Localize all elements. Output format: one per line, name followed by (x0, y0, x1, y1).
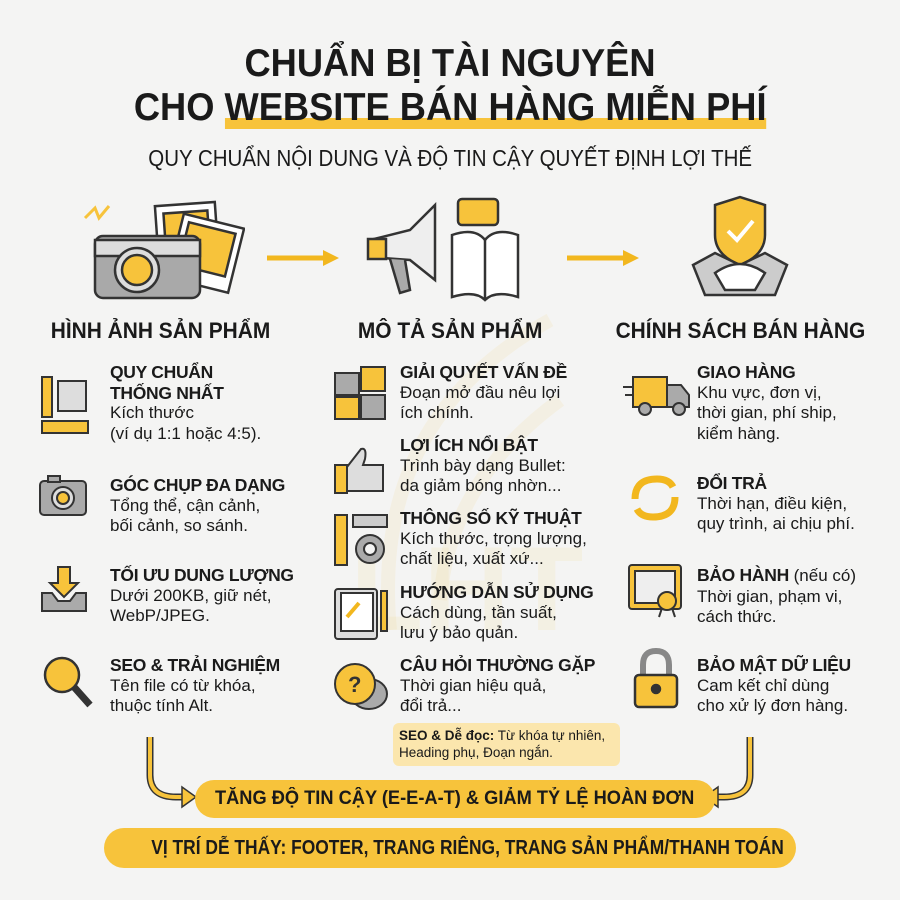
text: cau hoi: CÂU HỎI THƯỜNG GẶP (400, 655, 595, 675)
banner: vi tri: VỊ TRÍ DỄ THẤY: FOOTER, TRANG RIÊNG, TRANG SẢN PHẨM/THANH TOÁN (151, 837, 784, 859)
watermark logo: LHT (350, 522, 583, 656)
icon: manual book (334, 588, 388, 640)
icon: ruler square (41, 376, 89, 434)
callout: seo (393, 723, 620, 766)
text: thong so (400, 508, 587, 568)
text: bao hanh: cách thức. (697, 607, 776, 626)
heading: mo ta: MÔ TẢ SẢN PHẨM (358, 318, 542, 343)
text: cau hoi: đổi trả... (400, 696, 461, 715)
panel: left column (39, 362, 294, 715)
text: bao hanh: Thời gian, phạm vi, (697, 586, 842, 606)
text: giai quyet: GIẢI QUYẾT VẤN ĐỀ (400, 362, 567, 382)
text: quy chuan: THỐNG NHẤT (110, 382, 224, 402)
text: quy chuan: Kích thước (110, 403, 194, 422)
text: loi ich (400, 435, 566, 495)
text: goc chup: Tổng thể, cận cảnh, (110, 496, 260, 514)
text: giai quyet: Đoạn mở đầu nêu lợi (400, 382, 560, 402)
text: giao hang: Khu vực, đơn vị, (697, 382, 822, 402)
icon: thumbs up (334, 448, 384, 494)
text: bao mat: Cam kết chỉ dùng (697, 676, 829, 694)
text: cau hoi (400, 655, 595, 715)
text: bao hanh: BẢO HÀNH (nếu có) (697, 565, 856, 585)
icon: truck (623, 376, 690, 416)
banner: eeat: TĂNG ĐỘ TIN CẬY (E-E-A-T) & GIẢM TỶ LỆ HOÀN ĐƠN (215, 788, 695, 809)
callout: seo: SEO & Dễ đọc: Từ khóa tự nhiên, (399, 728, 605, 743)
text: bao hanh (697, 565, 856, 626)
icon: question bubble (334, 663, 388, 710)
text: goc chup: GÓC CHỤP ĐA DẠNG (110, 475, 285, 495)
text: seo (110, 655, 280, 715)
text: toi uu (110, 565, 294, 625)
text: giao hang: thời gian, phí ship, (697, 403, 837, 422)
text: toi uu: Dưới 200KB, giữ nét, (110, 586, 271, 604)
text: huong dan (400, 582, 593, 642)
heading: hinh anh: HÌNH ẢNH SẢN PHẨM (50, 318, 270, 343)
arrow 2 (567, 250, 639, 266)
text: quy chuan: (ví dụ 1:1 hoặc 4:5). (110, 424, 261, 442)
icon: download tray (41, 566, 87, 612)
watermark logo (350, 314, 583, 656)
text: doi tra: ĐỔI TRẢ (697, 473, 767, 493)
text: quy chuan (110, 362, 261, 442)
text: bao mat: cho xử lý đơn hàng. (697, 696, 848, 715)
icon: shield handshake (692, 196, 788, 296)
panel: right column (623, 362, 856, 715)
text: huong dan: lưu ý bảo quản. (400, 623, 518, 642)
text: cau hoi: Thời gian hiệu quả, (400, 676, 546, 694)
icon: exchange arrows (632, 476, 678, 520)
arrow: left curve (140, 735, 200, 810)
banner: vi tri (104, 828, 796, 868)
text: loi ich: LỢI ÍCH NỔI BẬT (400, 435, 538, 455)
icon: megaphone and book (366, 198, 520, 302)
text: toi uu: TỐI ƯU DUNG LƯỢNG (110, 565, 294, 585)
callout: seo: Heading phụ, Đoạn ngắn. (399, 745, 553, 760)
text: seo: SEO & TRẢI NGHIỆM (110, 655, 280, 675)
icon: padlock (634, 648, 678, 708)
title: CHUẨN BỊ TÀI NGUYÊN (244, 42, 656, 85)
arrow 1 (267, 250, 339, 266)
text: huong dan: HƯỚNG DẪN SỬ DỤNG (400, 582, 593, 602)
title: CHO WEBSITE BÁN HÀNG MIỄN PHÍ (134, 86, 766, 129)
text: doi tra (697, 473, 855, 533)
text: seo: thuộc tính Alt. (110, 696, 213, 715)
icon: magnifier (44, 656, 93, 708)
text: loi ich: da giảm bóng nhờn... (400, 476, 561, 495)
text: huong dan: Cách dùng, tần suất, (400, 602, 557, 622)
text: giao hang: kiểm hàng. (697, 424, 780, 442)
icon: question bubble: ? (348, 672, 361, 697)
icon: camera (39, 475, 87, 516)
text: bao mat (697, 655, 851, 715)
arrow: right curve (700, 735, 760, 810)
title (134, 41, 768, 129)
icon: ruler gear (334, 514, 388, 566)
text: giao hang (697, 362, 837, 442)
text: doi tra: quy trình, ai chịu phí. (697, 514, 855, 533)
text: thong so: THÔNG SỐ KỸ THUẬT (400, 508, 582, 528)
text: giai quyet: ích chính. (400, 403, 474, 422)
subtitle: QUY CHUẨN NỘI DUNG VÀ ĐỘ TIN CẬY QUYẾT ĐỊNH LỢI THẾ (148, 145, 752, 171)
heading: chinh sach: CHÍNH SÁCH BÁN HÀNG (615, 318, 865, 343)
banner: eeat (195, 780, 715, 818)
text: seo: Tên file có từ khóa, (110, 676, 256, 694)
text: goc chup (110, 475, 285, 535)
text: loi ich: Trình bày dạng Bullet: (400, 456, 566, 474)
text: quy chuan: QUY CHUẨN (110, 362, 213, 382)
icon: certificate (628, 564, 682, 618)
text: thong so: chất liệu, xuất xứ... (400, 549, 544, 568)
icon: camera and photos (84, 200, 245, 300)
panel: middle column (334, 362, 620, 766)
text: goc chup: bối cảnh, so sánh. (110, 516, 248, 535)
text: giao hang: GIAO HÀNG (697, 362, 795, 382)
text: thong so: Kích thước, trọng lượng, (400, 528, 587, 548)
text: giai quyet (400, 362, 567, 422)
text: doi tra: Thời hạn, điều kiện, (697, 494, 847, 512)
icon: puzzle (334, 366, 386, 420)
text: toi uu: WebP/JPEG. (110, 606, 210, 625)
text: bao mat: BẢO MẬT DỮ LIỆU (697, 655, 851, 675)
